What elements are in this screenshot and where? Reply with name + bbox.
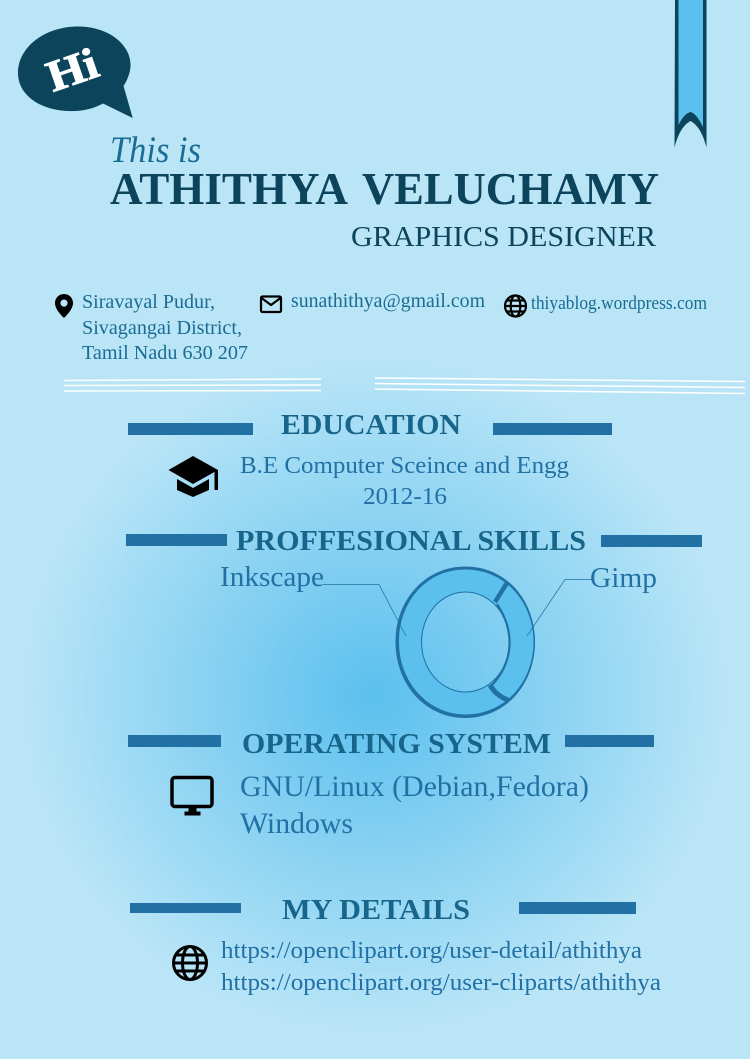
- heading: my details: MY DETAILS: [282, 894, 470, 926]
- heading: education: [128, 409, 612, 441]
- address text: Sivagangai District,: [82, 317, 242, 339]
- donut ring fill: [399, 570, 534, 714]
- icon: location pin: [55, 294, 73, 318]
- icon: monitor: [172, 778, 212, 816]
- subtitle: job role: GRAPHICS DESIGNER: [351, 221, 657, 253]
- icon: Hi speech bubble: [18, 26, 133, 118]
- education text: 2012-16: [363, 484, 447, 510]
- heading: my details: [130, 894, 636, 926]
- title: name: VELUCHAMY: [362, 163, 659, 214]
- label: inkscape: [220, 561, 406, 636]
- label: inkscape: Inkscape: [220, 561, 324, 593]
- donut ring outline: [396, 566, 535, 718]
- divider lines right: [375, 378, 745, 394]
- heading: professional skills: [126, 525, 702, 557]
- operating system text: Windows: [240, 807, 353, 840]
- segment dividers: [495, 583, 507, 602]
- address text: Tamil Nadu 630 207: [82, 342, 248, 364]
- links text: https://openclipart.org/user-cliparts/athithya: [221, 970, 661, 996]
- links text: [221, 938, 661, 996]
- label: gimp: Gimp: [590, 562, 657, 594]
- heading: education: EDUCATION: [281, 409, 461, 441]
- website text: thiyablog.wordpress.com: [531, 293, 707, 314]
- intro text: This is: This is: [110, 130, 201, 171]
- bubble text: Hi: Hi: [40, 39, 104, 101]
- heading: operating system: [128, 728, 654, 760]
- divider lines left: [64, 379, 321, 391]
- address text: Siravayal Pudur,: [82, 291, 215, 313]
- education text: [240, 453, 569, 510]
- email text: sunathithya@gmail.com: [291, 290, 485, 312]
- icon: graduation cap: [168, 456, 218, 497]
- heading: operating system: OPERATING SYSTEM: [242, 728, 551, 760]
- label: gimp: [527, 562, 657, 636]
- address text: [82, 291, 248, 364]
- links text: https://openclipart.org/user-detail/athithya: [221, 938, 642, 964]
- icon: ribbon bookmark: [674, 0, 706, 148]
- title: name: [110, 163, 659, 214]
- operating system text: GNU/Linux (Debian,Fedora): [240, 770, 589, 803]
- inner ring outline: [422, 592, 510, 692]
- title: name: ATHITHYA: [110, 163, 348, 214]
- donut chart: skills: [396, 566, 535, 718]
- icon: web globe: [174, 946, 206, 980]
- education text: B.E Computer Sceince and Engg: [240, 453, 569, 479]
- icon: mail: [261, 296, 281, 312]
- icon: globe: [505, 296, 526, 316]
- heading: professional skills: PROFFESIONAL SKILLS: [236, 525, 586, 557]
- operating system text: [240, 770, 589, 840]
